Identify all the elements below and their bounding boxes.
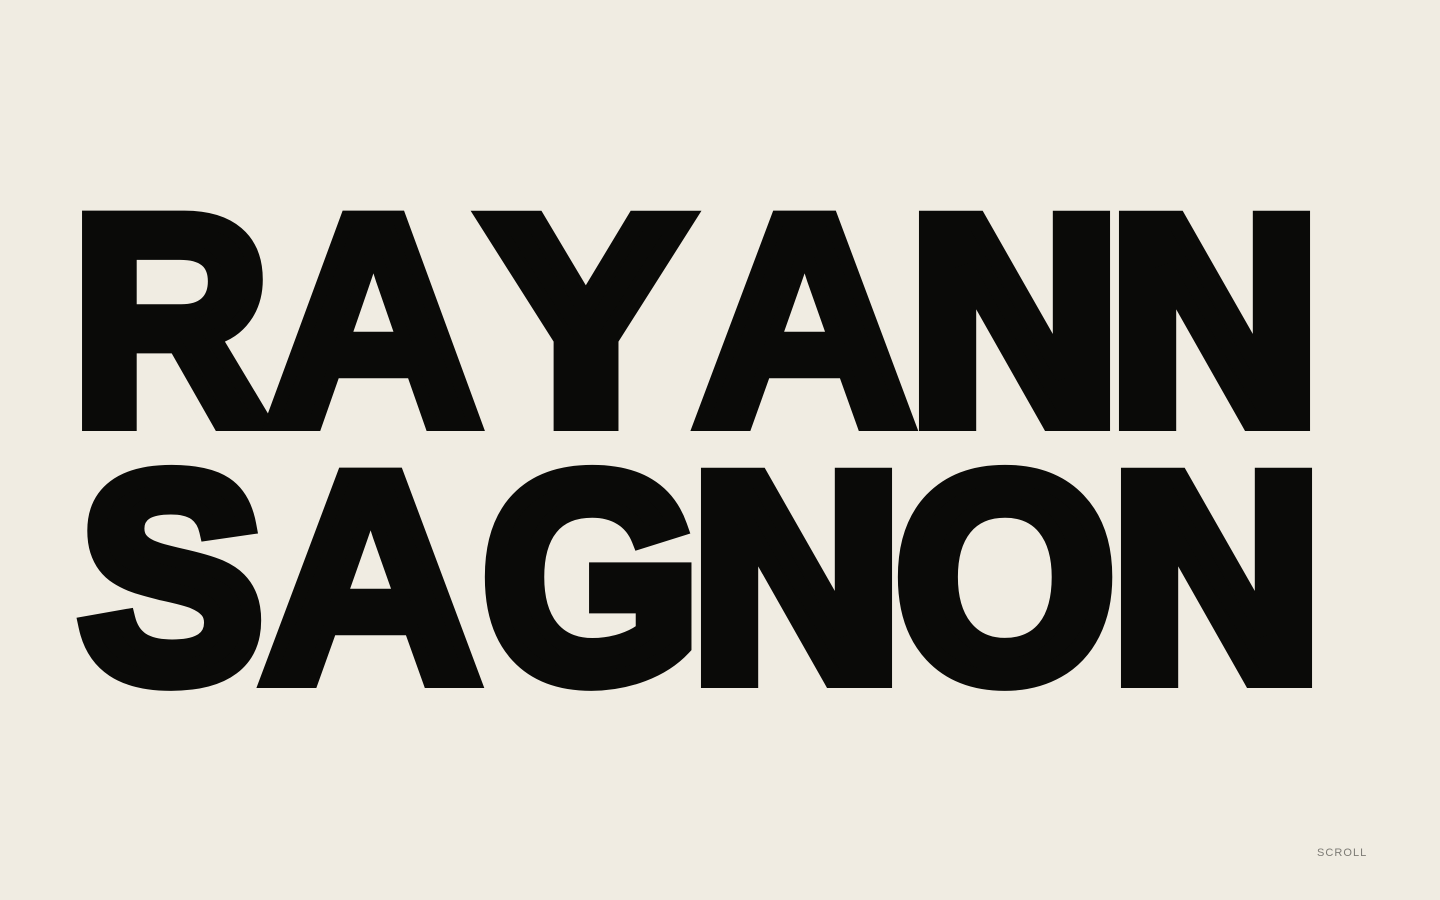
- title line: RAYANN: N: [1110, 158, 1320, 483]
- title line: SAGNON: G: [483, 415, 699, 740]
- title line: SAGNON: O: [896, 414, 1114, 740]
- title line: SAGNON: S: [80, 414, 262, 740]
- title line: SAGNON: N: [1112, 415, 1322, 740]
- title line: RAYANN: Y: [484, 159, 688, 483]
- title line: RAYANN: R: [71, 154, 270, 486]
- title line: RAYANN: N: [910, 158, 1120, 483]
- title line: RAYANN: [71, 152, 1320, 488]
- scroll hint: SCROLL: [1317, 847, 1367, 859]
- title line: SAGNON: [80, 409, 1322, 745]
- title line: SAGNON: N: [692, 415, 902, 740]
- title line: RAYANN: A: [693, 152, 916, 488]
- title line: RAYANN: A: [264, 152, 483, 488]
- title line: SAGNON: A: [259, 409, 482, 745]
